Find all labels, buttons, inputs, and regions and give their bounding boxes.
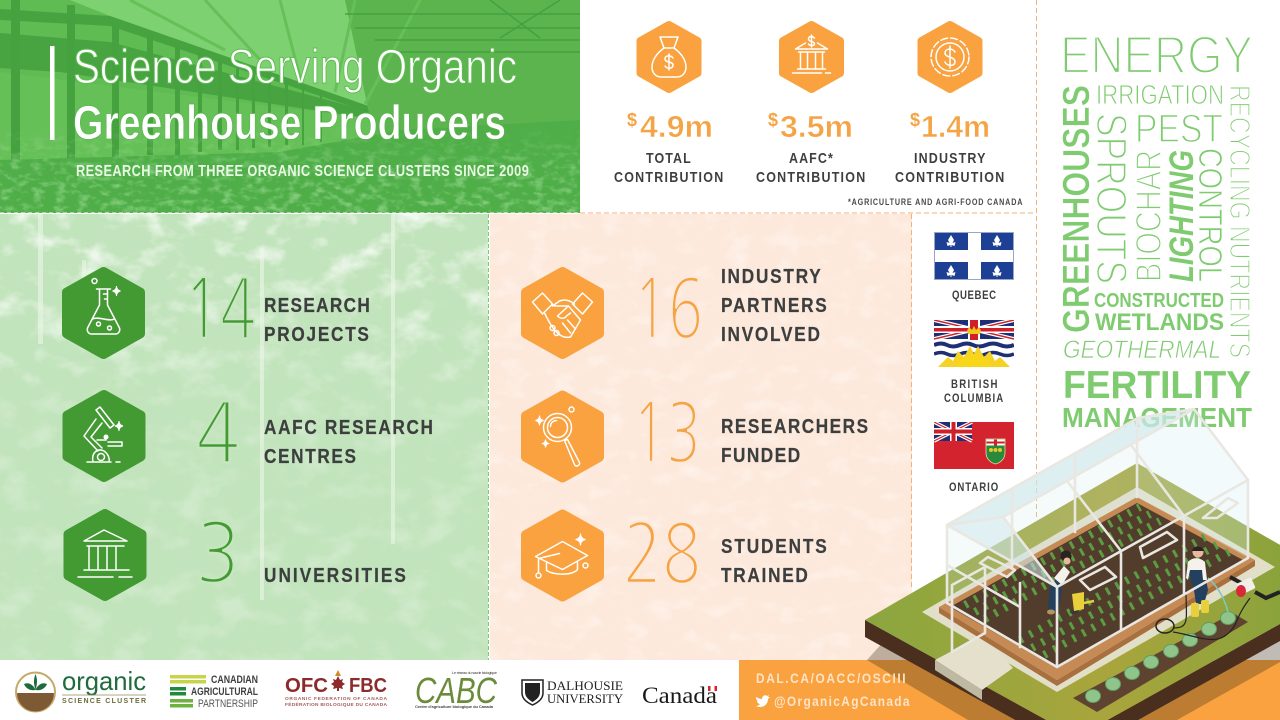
- icon: money bag: [640, 25, 698, 89]
- logo: CABC: Centre d'agriculture biologique du Canada: [415, 704, 494, 709]
- infographic canvas: @OrganicAgCanada: [774, 693, 910, 709]
- title block: Greenhouse Producers: [73, 97, 506, 150]
- label: British Columbia: BRITISH: [951, 378, 998, 391]
- stat: researchers funded: FUNDED: [721, 444, 800, 466]
- label: British Columbia: COLUMBIA: [944, 392, 1003, 405]
- funding stat: AAFC contribution: $: [768, 110, 778, 130]
- word cloud: MANAGEMENT: [1062, 402, 1252, 433]
- funding stat: industry contribution: 1.4m: [921, 109, 990, 144]
- logo: OFC FBC: FÉDÉRATION BIOLOGIQUE DU CANADA: [285, 700, 388, 708]
- icon: gear with dollar: [922, 25, 978, 89]
- stat: students trained: STUDENTS: [721, 535, 827, 557]
- word cloud: RECYCLING NUTRIENTS: [1223, 85, 1255, 358]
- funding stat: AAFC contribution: 3.5m: [780, 109, 853, 144]
- stat: universities: [68, 512, 406, 596]
- worker tending plants: [1047, 550, 1078, 614]
- worker with hose: [1186, 546, 1228, 617]
- stat: AAFC research centres: AAFC RESEARCH: [264, 416, 433, 438]
- logo: Canadian Agricultural Partnership: [170, 674, 258, 710]
- ground block: [865, 463, 1280, 720]
- funding stat: industry contribution: INDUSTRY: [914, 150, 985, 166]
- word cloud: FERTILITY: [1063, 364, 1251, 407]
- funding stat: AAFC contribution: [756, 25, 865, 185]
- label: Ontario: ONTARIO: [949, 481, 998, 494]
- word cloud: ENERGY: [1060, 26, 1253, 85]
- flag: British Columbia: [934, 320, 1014, 367]
- hose and pump: [1156, 577, 1280, 640]
- word cloud: GEOTHERMAL: [1063, 336, 1221, 364]
- stone walkway: [935, 635, 1013, 700]
- funding stat: total contribution: TOTAL: [646, 150, 691, 166]
- greenhouse ground shadow: [867, 600, 1280, 720]
- number: 28: [623, 513, 701, 595]
- logo: organic science cluster: SCIENCE CLUSTER: [62, 698, 146, 705]
- word cloud: LIGHTING: [1163, 150, 1201, 282]
- title block: [50, 41, 517, 150]
- icon: university building: [68, 514, 142, 596]
- stat: research projects: [67, 268, 370, 354]
- glass walls and roof: [947, 409, 1248, 603]
- stat: research projects: PROJECTS: [264, 323, 369, 345]
- word cloud: BIOCHAR: [1128, 150, 1169, 282]
- flag: Quebec: [934, 232, 1014, 280]
- flag: Ontario: [934, 422, 1014, 469]
- rows of seedlings: [965, 507, 1229, 655]
- funding stat: AAFC contribution: CONTRIBUTION: [756, 169, 865, 185]
- funding stat: total contribution: [614, 25, 723, 185]
- panel: white funding background: [580, 0, 1036, 213]
- logo: Canadian Agricultural Partnership: CANADIAN: [211, 674, 258, 686]
- stat: AAFC research centres: CENTRES: [264, 445, 356, 467]
- funding stat: total contribution: CONTRIBUTION: [614, 169, 723, 185]
- stat: students trained: [526, 513, 827, 596]
- stat: industry partners: INDUSTRY: [721, 265, 821, 287]
- logo: Canada wordmark: Canada: [642, 683, 717, 708]
- funding stat: industry contribution: [895, 25, 1004, 185]
- logo: organic science cluster: organic: [62, 666, 146, 696]
- word cloud: WETLANDS: [1095, 309, 1224, 336]
- stat: researchers funded: RESEARCHERS: [721, 415, 868, 437]
- logo: OFC FBC: OFC: [285, 675, 328, 697]
- funding stat: industry contribution: CONTRIBUTION: [895, 169, 1004, 185]
- funding stat: industry contribution: $: [910, 110, 920, 130]
- stat: industry partners: PARTNERS: [721, 294, 827, 316]
- logo: Canadian Agricultural Partnership: PARTNERSHIP: [198, 698, 258, 710]
- word cloud: GREENHOUSES: [1056, 85, 1098, 333]
- logo: OFC FBC: FBC: [349, 675, 387, 697]
- funding stat: total contribution: 4.9m: [640, 109, 713, 144]
- logo: OFC FBC: [285, 670, 388, 708]
- panel: people background (peach): [490, 214, 912, 660]
- logo: CABC: Le réseau du savoir biologique: [452, 670, 498, 675]
- word cloud: PEST: [1135, 107, 1223, 151]
- stat: researchers funded: [526, 392, 868, 478]
- icon: flask: [67, 272, 140, 354]
- panel: header with greenhouse photo: [0, 0, 580, 213]
- icon: twitter bird: [756, 695, 770, 707]
- watering can: [1072, 592, 1094, 611]
- logo: organic science cluster: [16, 666, 146, 712]
- word cloud: CONSTRUCTED: [1094, 290, 1224, 312]
- logo: Canadian Agricultural Partnership: AGRICULTURAL: [191, 686, 258, 698]
- footer band: [0, 660, 739, 720]
- stat: AAFC research centres: [68, 392, 433, 477]
- word cloud: IRRIGATION: [1096, 79, 1224, 110]
- icon: microscope: [68, 395, 140, 477]
- illustration: greenhouse on isometric plot: [865, 409, 1280, 720]
- funding stat: AAFC contribution: AAFC*: [789, 150, 834, 166]
- stat: research projects: RESEARCH: [264, 294, 370, 316]
- number: 13: [632, 392, 701, 474]
- logo: Dalhousie University: DALHOUSIE: [547, 679, 623, 693]
- logo: CABC: CABC: [415, 670, 498, 711]
- word cloud: SPROUTS: [1087, 113, 1135, 284]
- number: 3: [196, 512, 240, 594]
- word cloud: [1056, 26, 1255, 433]
- greenhouse frame: [947, 409, 1248, 667]
- subtitle: RESEARCH FROM THREE ORGANIC SCIENCE CLUSTERS SINCE 2009: [76, 163, 529, 180]
- stat: industry partners: INVOLVED: [721, 323, 820, 345]
- icon: magnifying glass: [526, 396, 599, 478]
- logo: Dalhousie University: UNIVERSITY: [547, 692, 623, 706]
- title block: Science Serving Organic: [73, 41, 517, 94]
- funding stat: total contribution: $: [627, 110, 637, 130]
- number: 14: [184, 268, 256, 350]
- footnote: *AGRICULTURE AND AGRI-FOOD CANADA: [848, 197, 1023, 207]
- label: British Columbia: [944, 378, 1003, 405]
- vegetable patch with cabbages: [1073, 612, 1248, 712]
- raised bed: [939, 497, 1255, 686]
- panel: white provinces background: [912, 214, 1036, 660]
- stat: students trained: TRAINED: [721, 564, 808, 586]
- label: Quebec: QUEBEC: [952, 289, 996, 302]
- website and social handle: DAL.CA/OACC/OSCIII: [756, 670, 906, 686]
- stat: industry partners: [526, 265, 827, 354]
- number: 4: [196, 392, 240, 474]
- icon: handshake: [526, 272, 599, 354]
- logo: OFC FBC: ORGANIC FEDERATION OF CANADA: [285, 696, 388, 702]
- number: 16: [633, 268, 703, 350]
- word cloud: CONTROL: [1192, 148, 1229, 282]
- icon: bank with dollar: [783, 25, 840, 89]
- panel: research output background (green): [0, 214, 488, 660]
- stat: universities: UNIVERSITIES: [264, 564, 406, 586]
- website and social handle: [756, 670, 906, 707]
- logo: Dalhousie University: [522, 679, 623, 706]
- icon: graduation cap: [526, 514, 599, 596]
